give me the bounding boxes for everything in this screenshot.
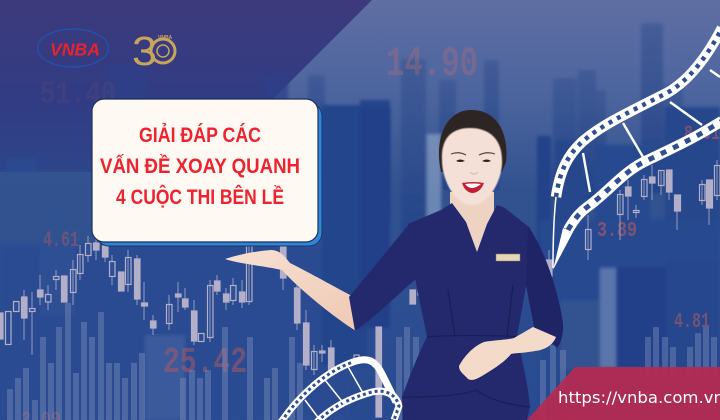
dark buildings on triangle — [0, 65, 288, 242]
title: GIẢI ĐÁP CÁC — [139, 124, 261, 147]
background city skyline — [308, 23, 720, 259]
volume bars — [7, 303, 717, 420]
jacket sleeve left — [349, 223, 425, 331]
jacket seams — [402, 285, 530, 407]
neck — [450, 192, 494, 254]
ticker numbers: 25.42 — [163, 342, 247, 383]
title — [100, 124, 300, 209]
ticker numbers: 51.40 — [40, 76, 116, 113]
logo: 30 years — [132, 28, 175, 74]
candlestick chart — [0, 160, 720, 417]
red url banner — [527, 367, 720, 420]
ticker numbers: 4.61 — [43, 228, 79, 253]
name badge — [496, 254, 520, 261]
jacket torso — [402, 203, 530, 420]
eyes — [456, 160, 491, 162]
ticker numbers: 3.89 — [597, 220, 637, 243]
nose — [470, 172, 478, 174]
title: VẤN ĐỀ XOAY QUANH — [100, 155, 300, 178]
gap between arm and body — [518, 292, 533, 336]
dark corner triangle — [0, 0, 372, 172]
logo: VNBA — [38, 29, 108, 67]
speech box — [92, 99, 322, 246]
jacket sleeve right — [526, 226, 563, 348]
logo: 30 years: VNBA — [158, 35, 173, 41]
logo: 30 years: 3 — [132, 28, 157, 74]
film strip: small — [281, 360, 399, 420]
eyebrows — [451, 153, 495, 155]
foreground city blocks — [0, 105, 720, 420]
ticker numbers: 14.90 — [386, 40, 478, 88]
forearm and hand — [459, 327, 556, 380]
logo: VNBA: VNBA — [50, 40, 100, 60]
smile — [462, 182, 484, 193]
title: 4 CUỘC THI BÊN LỀ — [116, 185, 284, 209]
hair — [439, 110, 506, 172]
extended arm — [225, 250, 356, 331]
url text: https://vnba.com.vn — [558, 388, 720, 407]
presenter — [225, 110, 563, 420]
face — [442, 128, 502, 205]
film strip: large — [553, 28, 720, 270]
